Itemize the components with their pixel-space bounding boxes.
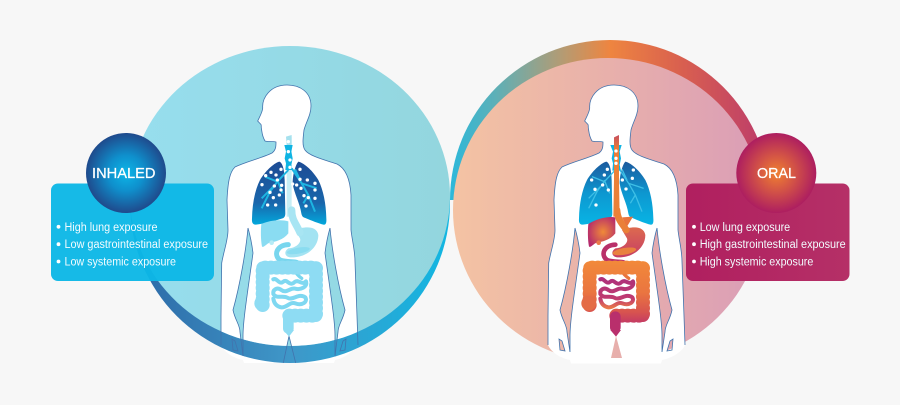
figure: inhaled body silhouette: [221, 85, 358, 363]
panel: inhaled circle: [130, 46, 450, 365]
white particles: inhaled: [260, 140, 317, 208]
small intestine: inhaled: [273, 279, 306, 307]
gallbladder: oral: [596, 240, 601, 245]
inner disc: inhaled: [130, 46, 450, 346]
liver: inhaled: [261, 220, 288, 247]
figure: oral body silhouette: [548, 85, 685, 364]
duodenum: inhaled: [277, 245, 298, 265]
infographic: inhaled vs oral exposure: [51, 40, 850, 363]
small intestine: oral: [600, 279, 633, 307]
organs: inhaled lungs and trachea: [252, 135, 326, 225]
bullet list: oral: High gastrointestinal exposure: [700, 239, 846, 251]
right lung: oral: [620, 162, 653, 225]
left lung: inhaled: [252, 162, 285, 225]
bullet list: oral: Low lung exposure: [700, 222, 790, 234]
bullet list: oral: High systemic exposure: [700, 256, 813, 268]
white particles: oral: [590, 149, 635, 207]
lower esophagus: oral: [617, 210, 626, 230]
trachea: oral: [610, 145, 622, 171]
callout: oral list: [686, 184, 850, 281]
inner disc: oral: [453, 58, 763, 362]
badge: inhaled: [86, 133, 166, 213]
crescent ring: oral: [450, 40, 770, 200]
trachea: inhaled: [284, 135, 293, 170]
bullet list: inhaled: Low systemic exposure: [64, 256, 176, 268]
badge: oral: ORAL: [757, 166, 796, 182]
esophagus: oral: [613, 135, 620, 217]
figure: inhaled body outline: [221, 85, 358, 363]
lower esophagus: inhaled: [292, 210, 300, 233]
bronchi: inhaled: [262, 168, 317, 212]
gallbladder: inhaled: [269, 240, 274, 245]
organs: inhaled digestive tract: [254, 210, 318, 337]
bronchi: oral: [589, 168, 644, 212]
esophagus: inhaled: [287, 137, 292, 217]
crescent ring: inhaled: [130, 190, 450, 365]
bullet list: inhaled: High lung exposure: [64, 222, 158, 234]
left lung: oral: [579, 162, 612, 225]
duodenum: oral: [604, 245, 625, 265]
right lung: inhaled: [293, 162, 326, 225]
colon: inhaled: [254, 268, 316, 337]
liver: oral: [588, 217, 615, 247]
bullet list: oral: [692, 222, 846, 268]
pancreas: inhaled: [286, 246, 310, 256]
callout: inhaled list: [51, 184, 214, 281]
badge: inhaled: INHALED: [92, 166, 156, 182]
badge: oral: [736, 133, 816, 213]
stomach: oral: [612, 227, 645, 257]
body outline: oral: [548, 85, 685, 352]
bullet list: inhaled: Low gastrointestinal exposure: [64, 239, 208, 251]
organs: oral digestive tract: [581, 210, 645, 337]
organs: oral lungs and trachea: [579, 135, 653, 225]
bullet list: inhaled: [57, 222, 208, 268]
pancreas: oral: [612, 246, 637, 257]
panel: oral circle: [450, 40, 770, 362]
colon blob and rectum: oral: [581, 296, 596, 311]
stomach: inhaled: [285, 227, 318, 257]
colon: oral: [590, 268, 643, 316]
